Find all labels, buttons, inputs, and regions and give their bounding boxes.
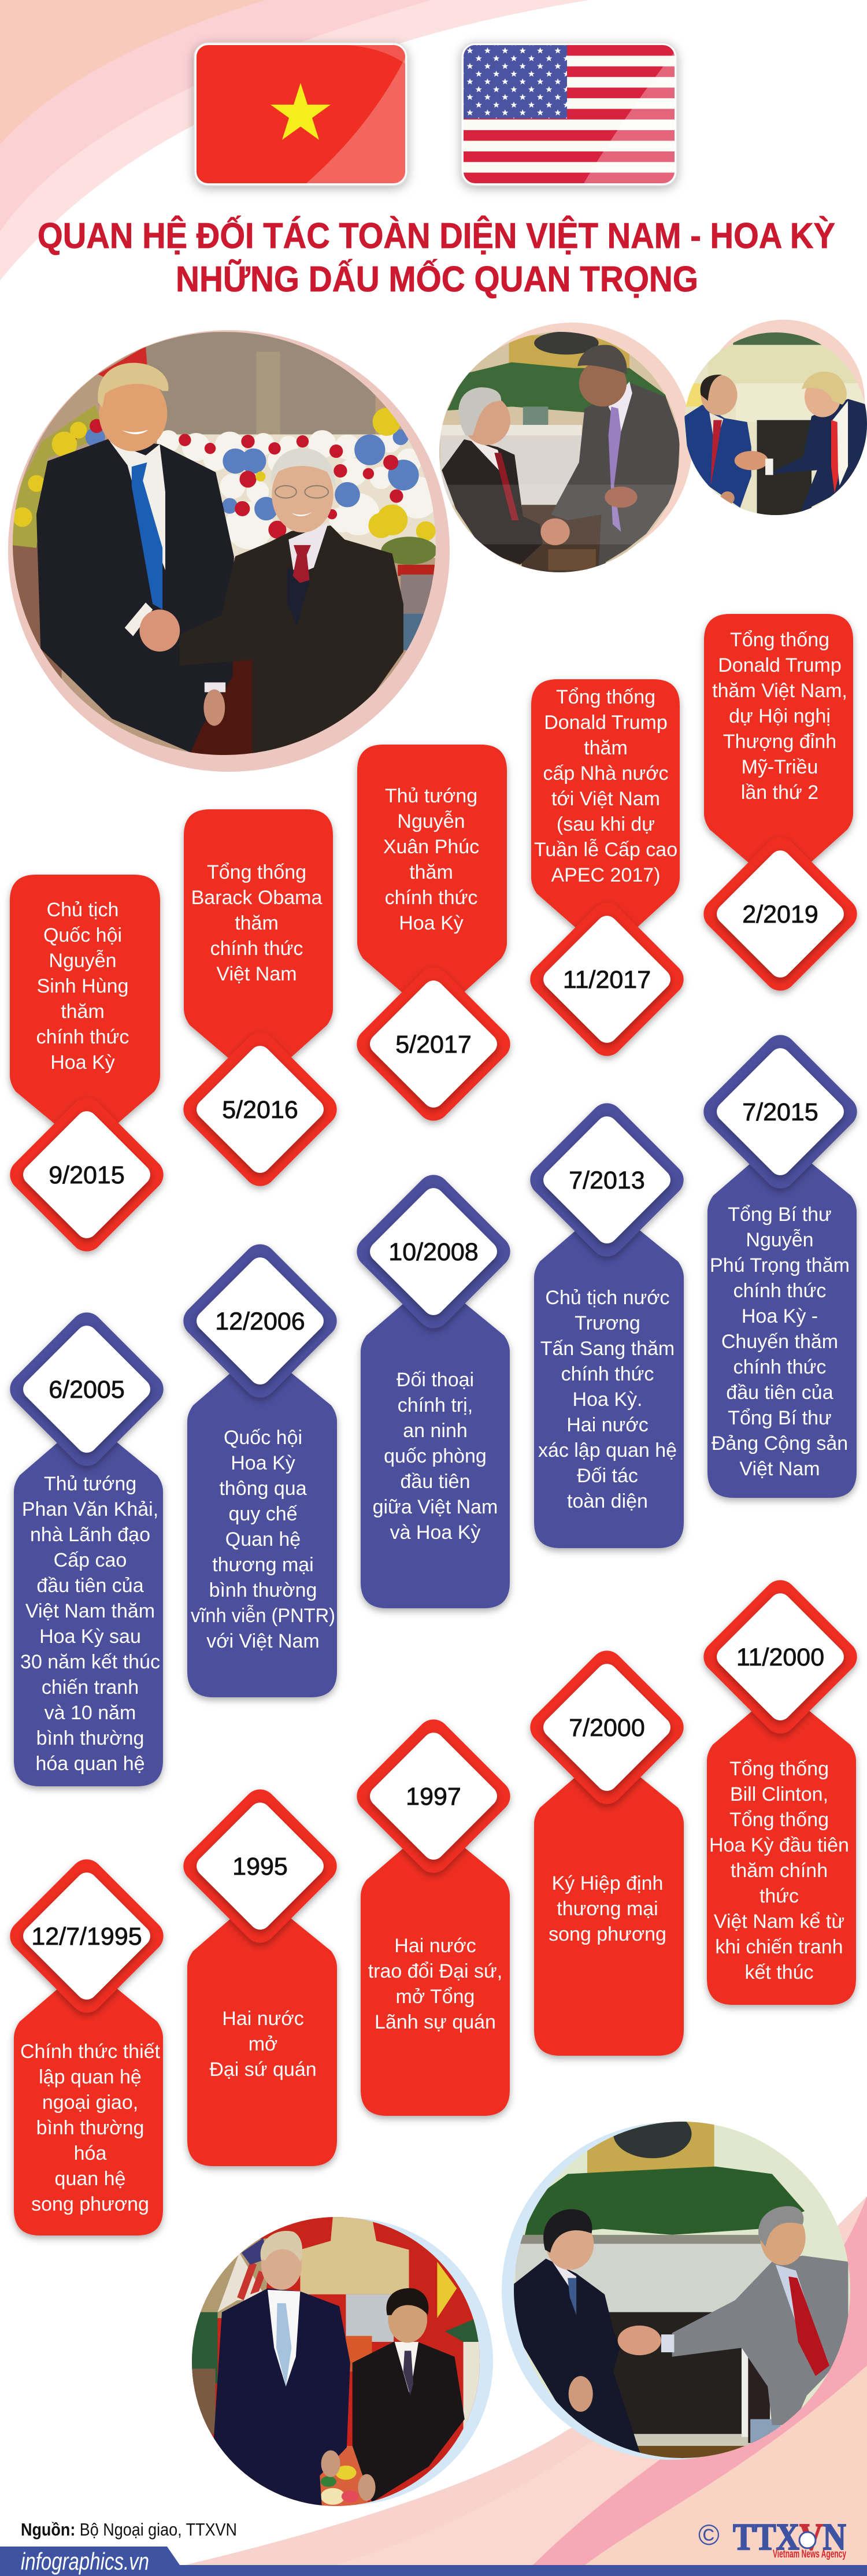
text: hóa quan hệ bbox=[35, 1753, 145, 1775]
footer bar bbox=[0, 2547, 867, 2576]
text: Việt Nam thăm bbox=[25, 1600, 155, 1622]
text: quan hệ bbox=[55, 2168, 125, 2190]
text: Nguyễn bbox=[746, 1229, 814, 1251]
date diamond: 12/7/1995 bbox=[31, 1923, 142, 1950]
text: Hai nước bbox=[222, 2008, 304, 2030]
date diamond: 7/2015 bbox=[742, 1098, 818, 1126]
text: Tổng thống bbox=[556, 686, 655, 708]
card bbox=[707, 1687, 856, 2005]
text: Hoa Kỳ sau bbox=[39, 1626, 141, 1648]
card bbox=[534, 1750, 684, 2056]
date diamond bbox=[3, 1853, 170, 2019]
text: thăm bbox=[409, 861, 453, 883]
text: Phú Trọng thăm bbox=[710, 1254, 850, 1276]
text: Tuần lễ Cấp cao bbox=[534, 839, 677, 861]
text: thăm bbox=[61, 1001, 105, 1023]
text: nhà Lãnh đạo bbox=[30, 1524, 150, 1546]
text: Ký Hiệp định bbox=[552, 1872, 663, 1894]
card bbox=[357, 745, 507, 1020]
text: Hoa Kỳ bbox=[231, 1452, 295, 1474]
date diamond: 2/2019 bbox=[742, 901, 818, 928]
timeline item: 7/2013 bbox=[524, 1097, 690, 1548]
text: thức bbox=[759, 1885, 799, 1907]
timeline item: 5/2016 bbox=[177, 809, 343, 1193]
timeline item: 11/2000 bbox=[697, 1574, 864, 2005]
card bbox=[534, 1204, 684, 1548]
text: Nguyễn bbox=[397, 810, 465, 832]
date diamond: 7/2000 bbox=[569, 1714, 645, 1742]
text: Hoa Kỳ. bbox=[573, 1389, 642, 1411]
text: APEC 2017) bbox=[551, 864, 660, 886]
text: khi chiến tranh bbox=[715, 1936, 843, 1958]
date diamond: 5/2017 bbox=[395, 1031, 472, 1058]
text: Đảng Cộng sản bbox=[712, 1433, 848, 1454]
background swoosh: top left bbox=[0, 0, 589, 280]
date diamond bbox=[524, 1644, 690, 1811]
photo: Phan Van Khai and George W. Bush bbox=[502, 2122, 850, 2460]
date diamond bbox=[177, 1026, 343, 1193]
text: Thượng đỉnh bbox=[723, 731, 836, 753]
text: Tổng thống bbox=[730, 629, 829, 651]
text: Việt Nam kể từ bbox=[714, 1911, 844, 1933]
text: an ninh bbox=[403, 1420, 468, 1442]
timeline item: 11/2017 bbox=[524, 679, 690, 1063]
photo: Clinton and Tran Duc Luong bbox=[185, 2211, 498, 2511]
background swoosh: bottom right bbox=[185, 2196, 867, 2565]
text: Tổng thống bbox=[207, 861, 306, 883]
timeline item: 9/2015 bbox=[3, 875, 170, 1258]
text: chính thức bbox=[733, 1356, 826, 1378]
text: Tổng Bí thư bbox=[728, 1407, 832, 1429]
text: và 10 năm bbox=[45, 1702, 136, 1724]
timeline item: 7/2015 bbox=[697, 1028, 864, 1498]
timeline item: 5/2017 bbox=[350, 745, 517, 1127]
date diamond bbox=[3, 1091, 170, 1258]
date diamond bbox=[524, 1097, 690, 1263]
text: Sinh Hùng bbox=[37, 975, 128, 997]
date diamond bbox=[177, 1783, 343, 1949]
text: Việt Nam bbox=[216, 963, 297, 985]
text: Tổng Bí thư bbox=[728, 1204, 832, 1226]
text: Trương bbox=[575, 1312, 640, 1334]
card bbox=[707, 1138, 857, 1498]
timeline item: 12/2006 bbox=[177, 1238, 343, 1697]
timeline item: 2/2019 bbox=[697, 614, 864, 997]
title bbox=[38, 216, 835, 299]
text: Nguyễn bbox=[49, 950, 117, 972]
text: Chủ tịch bbox=[47, 899, 118, 921]
text: và Hoa Kỳ bbox=[390, 1522, 480, 1544]
text: song phương bbox=[549, 1923, 666, 1945]
text: giữa Việt Nam bbox=[373, 1496, 498, 1518]
text: bình thường bbox=[36, 1727, 144, 1749]
card bbox=[361, 1822, 510, 2116]
text: chính thức bbox=[210, 938, 303, 960]
text: Quan hệ bbox=[225, 1528, 301, 1550]
text: Chuyến thăm bbox=[721, 1331, 838, 1353]
date diamond: 10/2008 bbox=[388, 1238, 479, 1266]
photo: Trump and Nguyen Phu Trong bbox=[0, 324, 450, 772]
card bbox=[361, 1278, 510, 1608]
date diamond: 5/2016 bbox=[222, 1096, 298, 1124]
card bbox=[531, 679, 680, 955]
source note: Nguồn: Bộ Ngoại giao, TTXVN bbox=[21, 2519, 237, 2540]
text: chính thức bbox=[561, 1363, 654, 1385]
date diamond bbox=[697, 831, 864, 997]
text: Donald Trump bbox=[718, 654, 842, 676]
text: Bill Clinton, bbox=[730, 1783, 828, 1805]
logo: TTXVN: © bbox=[698, 2519, 720, 2551]
title: NHỮNG DẤU MỐC QUAN TRỌNG bbox=[176, 260, 698, 299]
card bbox=[14, 1964, 163, 2236]
text: thương mại bbox=[212, 1554, 314, 1576]
text: cấp Nhà nước bbox=[543, 763, 669, 784]
text: Đối thoại bbox=[397, 1369, 474, 1391]
timeline item: 6/2005 bbox=[3, 1306, 170, 1786]
text: Hoa Kỳ - bbox=[742, 1305, 818, 1327]
text: đầu tiên của bbox=[726, 1382, 833, 1404]
text: Quốc hội bbox=[224, 1427, 302, 1449]
text: Mỹ-Triều bbox=[742, 756, 818, 778]
date diamond: 7/2013 bbox=[569, 1167, 645, 1194]
text: vĩnh viễn (PNTR) bbox=[191, 1605, 335, 1627]
text: Chính thức thiết bbox=[20, 2041, 161, 2063]
text: chính thức bbox=[385, 887, 477, 909]
text: Quốc hội bbox=[43, 924, 122, 946]
text: Hai nước bbox=[566, 1414, 649, 1436]
date diamond: 11/2000 bbox=[736, 1644, 824, 1671]
text: bình thường bbox=[36, 2117, 144, 2139]
text: chính thức bbox=[733, 1280, 826, 1302]
date diamond bbox=[3, 1306, 170, 1472]
date diamond: 1995 bbox=[232, 1853, 288, 1881]
card bbox=[14, 1417, 163, 1786]
card bbox=[10, 875, 160, 1150]
text: Hai nước bbox=[394, 1935, 476, 1957]
text: thăm bbox=[235, 912, 279, 934]
text: Đại sứ quán bbox=[209, 2059, 317, 2081]
date diamond bbox=[350, 961, 517, 1127]
flag: United States bbox=[461, 43, 677, 186]
text: hóa bbox=[74, 2142, 106, 2164]
text: Donald Trump bbox=[544, 712, 668, 734]
date diamond: 1997 bbox=[406, 1783, 461, 1811]
text: kết thúc bbox=[744, 1961, 814, 1983]
flag: Vietnam bbox=[194, 43, 407, 186]
text: thương mại bbox=[557, 1898, 658, 1920]
timeline item: 1997 bbox=[350, 1713, 517, 2116]
text: tới Việt Nam bbox=[551, 788, 660, 810]
text: 30 năm kết thúc bbox=[20, 1651, 160, 1673]
text: (sau khi dự bbox=[557, 813, 655, 835]
card bbox=[184, 809, 333, 1085]
date diamond: 11/2017 bbox=[563, 966, 651, 994]
card bbox=[187, 1348, 337, 1697]
text: lập quan hệ bbox=[39, 2066, 142, 2088]
text: quốc phòng bbox=[384, 1445, 487, 1467]
date diamond bbox=[697, 1028, 864, 1195]
text: bình thường bbox=[209, 1579, 317, 1601]
text: Thủ tướng bbox=[44, 1473, 136, 1495]
text: thông qua bbox=[219, 1478, 307, 1500]
text: lần thứ 2 bbox=[741, 782, 818, 804]
text: Chủ tịch nước bbox=[545, 1287, 670, 1309]
text: Phan Văn Khải, bbox=[22, 1498, 158, 1520]
date diamond: 6/2005 bbox=[49, 1376, 125, 1404]
text: xác lập quan hệ bbox=[538, 1439, 677, 1461]
text: mở bbox=[249, 2033, 277, 2055]
text: đầu tiên bbox=[400, 1471, 470, 1493]
timeline item: 10/2008 bbox=[350, 1168, 517, 1608]
date diamond bbox=[697, 1574, 864, 1740]
text: chính thức bbox=[36, 1026, 129, 1048]
timeline item: 12/7/1995 bbox=[3, 1853, 170, 2236]
text: Hoa Kỳ đầu tiên bbox=[709, 1834, 849, 1856]
text: với Việt Nam bbox=[206, 1630, 320, 1652]
text: Barack Obama bbox=[191, 887, 322, 909]
date diamond bbox=[350, 1713, 517, 1879]
text: thăm bbox=[584, 737, 628, 759]
text: Tổng thống bbox=[729, 1758, 829, 1780]
text: thăm chính bbox=[731, 1860, 828, 1882]
text: Xuân Phúc bbox=[383, 836, 479, 858]
text: ngoại giao, bbox=[42, 2092, 138, 2114]
text: đầu tiên của bbox=[36, 1575, 144, 1597]
text: toàn diện bbox=[567, 1490, 648, 1512]
website label: infographics.vn bbox=[21, 2548, 149, 2575]
text: chiến tranh bbox=[42, 1676, 139, 1698]
date diamond: 9/2015 bbox=[49, 1161, 125, 1189]
photo: Nguyen Phu Trong and Obama bbox=[439, 323, 691, 572]
photo: Nguyen Xuan Phuc and Trump bbox=[680, 320, 867, 519]
date diamond bbox=[524, 896, 690, 1063]
text: Cấp cao bbox=[54, 1549, 127, 1571]
date diamond bbox=[177, 1238, 343, 1404]
text: trao đổi Đại sứ, bbox=[368, 1960, 502, 1982]
text: thăm Việt Nam, bbox=[712, 680, 847, 702]
text: mở Tổng bbox=[396, 1986, 475, 2008]
date diamond: 12/2006 bbox=[215, 1308, 305, 1335]
text: Thủ tướng bbox=[385, 785, 477, 807]
card bbox=[704, 614, 853, 890]
text: quy chế bbox=[228, 1503, 298, 1525]
text: Lãnh sự quán bbox=[375, 2011, 496, 2033]
text: song phương bbox=[31, 2193, 149, 2215]
timeline item: 7/2000 bbox=[524, 1644, 690, 2056]
text: dự Hội nghị bbox=[729, 705, 831, 727]
text: Hoa Kỳ bbox=[50, 1052, 115, 1074]
text: Việt Nam bbox=[739, 1458, 820, 1480]
text: chính trị, bbox=[398, 1394, 473, 1416]
text: Hoa Kỳ bbox=[399, 912, 464, 934]
card bbox=[187, 1893, 337, 2166]
date diamond bbox=[350, 1168, 517, 1335]
text: Tổng thống bbox=[729, 1809, 829, 1831]
timeline item: 1995 bbox=[177, 1783, 343, 2166]
text: Tấn Sang thăm bbox=[540, 1338, 675, 1360]
text: Đối tác bbox=[577, 1465, 638, 1487]
logo: TTXVN: TTXVN bbox=[733, 2516, 846, 2558]
